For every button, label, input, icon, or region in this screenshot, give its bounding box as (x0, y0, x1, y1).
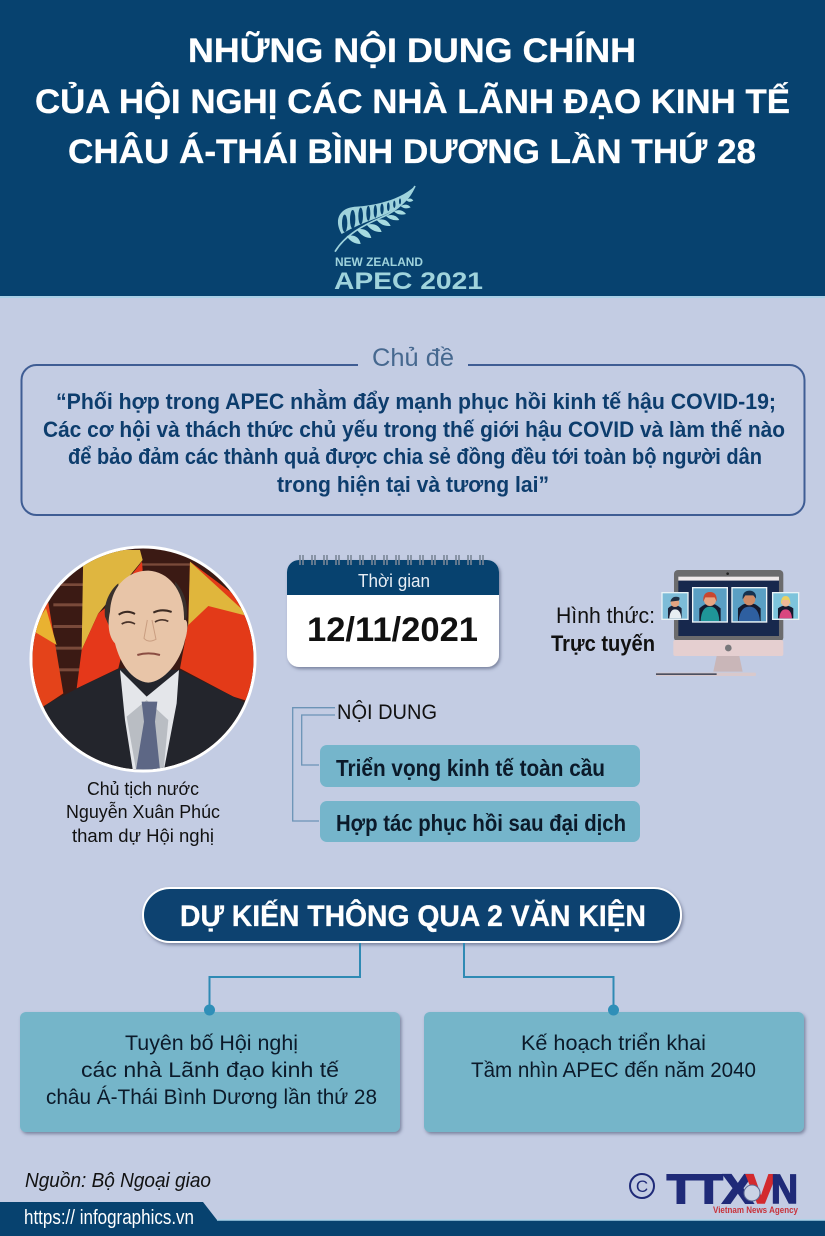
title (35, 31, 790, 171)
logo: APEC 2021 New Zealand fern: APEC 2021 (334, 268, 483, 295)
panel: document 1 (20, 1012, 400, 1132)
content item 1 (320, 745, 640, 787)
theme quote text (43, 389, 785, 497)
content item 2: Hợp tác phục hồi sau đại dịch (336, 810, 626, 836)
date: 12/11/2021 (307, 611, 478, 649)
calendar label: Thời gian (358, 571, 430, 591)
logo: TTXVN: TTX (667, 1166, 753, 1212)
format label (551, 603, 655, 656)
logo: APEC 2021 New Zealand fern (334, 186, 483, 295)
video tile 4 (773, 593, 799, 619)
portrait photo (30, 546, 257, 773)
title: CHÂU Á-THÁI BÌNH DƯƠNG LẦN THỨ 28 (68, 133, 756, 171)
format label: Trực tuyến (551, 631, 655, 656)
connector: right document (464, 943, 619, 1016)
icon: video conference monitor (656, 570, 799, 676)
heading pill: two documents (143, 888, 681, 942)
logo: TTXVN: N (771, 1166, 798, 1212)
heading pill: two documents: DỰ KIẾN THÔNG QUA 2 VĂN KIỆN (180, 899, 646, 933)
caption: portrait: Chủ tịch nước (87, 778, 199, 799)
panel: document 2 (424, 1012, 804, 1132)
panel: document 1: châu Á-Thái Bình Dương lần thứ 28 (46, 1086, 377, 1109)
bracket connectors (293, 708, 335, 821)
logo: TTXVN (630, 1166, 799, 1216)
heading: content: NỘI DUNG (337, 699, 437, 724)
panel: document 1: các nhà Lãnh đạo kinh tế (81, 1059, 339, 1082)
footer band (0, 1202, 825, 1236)
video tile 1 (662, 593, 688, 619)
logo: TTXVN: V (746, 1166, 777, 1212)
content item 2 (320, 801, 640, 842)
video tile 3 (732, 588, 767, 622)
heading: theme: Chủ đề (372, 344, 454, 372)
theme quote text: để bảo đảm các thành quả được chia sẻ đồng đều tới toàn bộ người dân (68, 444, 762, 469)
title: CỦA HỘI NGHỊ CÁC NHÀ LÃNH ĐẠO KINH TẾ (35, 82, 790, 121)
format label: Hình thức: (556, 603, 655, 628)
panel: document 2: Tầm nhìn APEC đến năm 2040 (471, 1059, 756, 1082)
theme quote text: “Phối hợp trong APEC nhằm đẩy mạnh phục hồi kinh tế hậu COVID-19; (56, 389, 776, 414)
logo: TTXVN: Vietnam News Agency (713, 1205, 799, 1216)
content section (293, 699, 640, 842)
panel: document 2: Kế hoạch triển khai (521, 1032, 706, 1055)
calendar: date (287, 555, 499, 667)
caption: portrait: tham dự Hội nghị (72, 825, 214, 846)
logo: APEC 2021 New Zealand fern: NEW ZEALAND (335, 257, 423, 269)
video tile 2 (693, 588, 727, 622)
title: NHỮNG NỘI DUNG CHÍNH (188, 31, 636, 70)
caption: portrait: Nguyễn Xuân Phúc (66, 801, 220, 822)
panel: theme (22, 344, 804, 515)
theme quote text: trong hiện tại và tương lai” (277, 472, 549, 497)
footer band: https:// infographics.vn (24, 1207, 194, 1229)
source: Nguồn: Bộ Ngoại giao (25, 1170, 211, 1192)
panel: document 1: Tuyên bố Hội nghị (125, 1032, 298, 1055)
header band (0, 0, 825, 298)
calendar rings (300, 555, 483, 565)
connector: left document (204, 943, 360, 1016)
logo: TTXVN: C (636, 1177, 648, 1196)
caption: portrait (66, 778, 220, 846)
theme quote text: Các cơ hội và thách thức chủ yếu trong thế giới hậu COVID và làm thế nào (43, 417, 785, 442)
content item 1: Triển vọng kinh tế toàn cầu (336, 755, 605, 781)
